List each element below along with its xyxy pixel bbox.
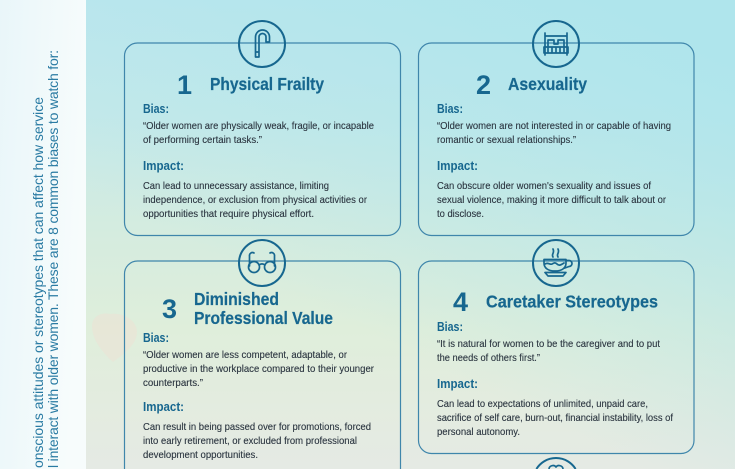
impact text: Can obscure older women's sexuality and issues of bbox=[437, 181, 651, 192]
panel: asexuality bbox=[418, 21, 694, 236]
impact text: sacrifice of self care, burn-out, financial instability, loss of bbox=[437, 413, 673, 424]
impact text: into early retirement, or excluded from professional bbox=[143, 436, 357, 447]
bias text bbox=[437, 319, 660, 364]
bias text: the needs of others first.” bbox=[437, 353, 541, 364]
bias text: romantic or sexual relationships.” bbox=[437, 135, 577, 146]
number 3: 3 bbox=[162, 294, 177, 324]
bias text bbox=[143, 101, 374, 146]
impact text bbox=[143, 158, 368, 220]
bias text: counterparts.” bbox=[143, 378, 204, 389]
panel: caretaker stereotypes bbox=[418, 240, 694, 454]
impact text bbox=[143, 399, 371, 461]
vertical intro text: l interact with older women. These are 8 common biases to watch for: bbox=[45, 50, 61, 468]
bias text: Bias: bbox=[143, 101, 169, 116]
impact text: personal autonomy. bbox=[437, 427, 520, 438]
panel: physical frailty bbox=[124, 21, 400, 236]
bias text: “Older women are physically weak, fragile, or incapable bbox=[143, 121, 374, 132]
heading: diminished professional value: Professional Value bbox=[194, 308, 333, 328]
bias text: Bias: bbox=[437, 101, 463, 116]
left side panel bbox=[0, 0, 86, 469]
bias text: “It is natural for women to be the caregiver and to put bbox=[437, 339, 660, 350]
bias text: Bias: bbox=[143, 330, 169, 345]
impact text: Impact: bbox=[143, 399, 184, 414]
vertical intro text: onscious attitudes or stereotypes that can affect how service bbox=[30, 97, 46, 468]
faint heart decoration bbox=[92, 314, 137, 362]
impact text: Impact: bbox=[437, 158, 478, 173]
heading: asexuality: Asexuality bbox=[508, 74, 587, 94]
impact text: Can lead to expectations of unlimited, unpaid care, bbox=[437, 399, 648, 410]
number 1: 1 bbox=[177, 70, 192, 100]
icon: walking cane bbox=[239, 21, 285, 67]
icon: steaming cup bbox=[533, 240, 579, 286]
number 4: 4 bbox=[453, 287, 468, 317]
impact text: opportunities that require physical effort. bbox=[143, 209, 314, 220]
impact text: independence, or exclusion from physical activities or bbox=[143, 195, 368, 206]
impact text: development opportunities. bbox=[143, 450, 258, 461]
panel: diminished professional value bbox=[124, 240, 400, 469]
impact text: Can result in being passed over for promotions, forced bbox=[143, 422, 371, 433]
impact text bbox=[437, 376, 673, 438]
impact text: Impact: bbox=[143, 158, 184, 173]
vertical intro text bbox=[30, 50, 61, 468]
impact text: sexual violence, making it more difficult to talk about or bbox=[437, 195, 667, 206]
impact text bbox=[437, 158, 667, 220]
bias text bbox=[437, 101, 671, 146]
heading: diminished professional value bbox=[194, 289, 333, 328]
bias text: of performing certain tasks.” bbox=[143, 135, 263, 146]
impact text: Impact: bbox=[437, 376, 478, 391]
heading: caretaker stereotypes: Caretaker Stereotypes bbox=[486, 292, 658, 312]
icon: glasses bbox=[239, 240, 285, 286]
icon: next panel badge bbox=[536, 458, 576, 469]
heading: physical frailty: Physical Frailty bbox=[210, 74, 324, 94]
icon: bed bbox=[533, 21, 579, 67]
heading: diminished professional value: Diminished bbox=[194, 289, 279, 309]
bias text: “Older women are not interested in or capable of having bbox=[437, 121, 671, 132]
number 2: 2 bbox=[476, 70, 491, 100]
impact text: Can lead to unnecessary assistance, limiting bbox=[143, 181, 329, 192]
bias text: productive in the workplace compared to their younger bbox=[143, 364, 375, 375]
bias text: Bias: bbox=[437, 319, 463, 334]
bias text bbox=[143, 330, 375, 389]
bias text: “Older women are less competent, adaptable, or bbox=[143, 350, 348, 361]
impact text: to disclose. bbox=[437, 209, 484, 220]
